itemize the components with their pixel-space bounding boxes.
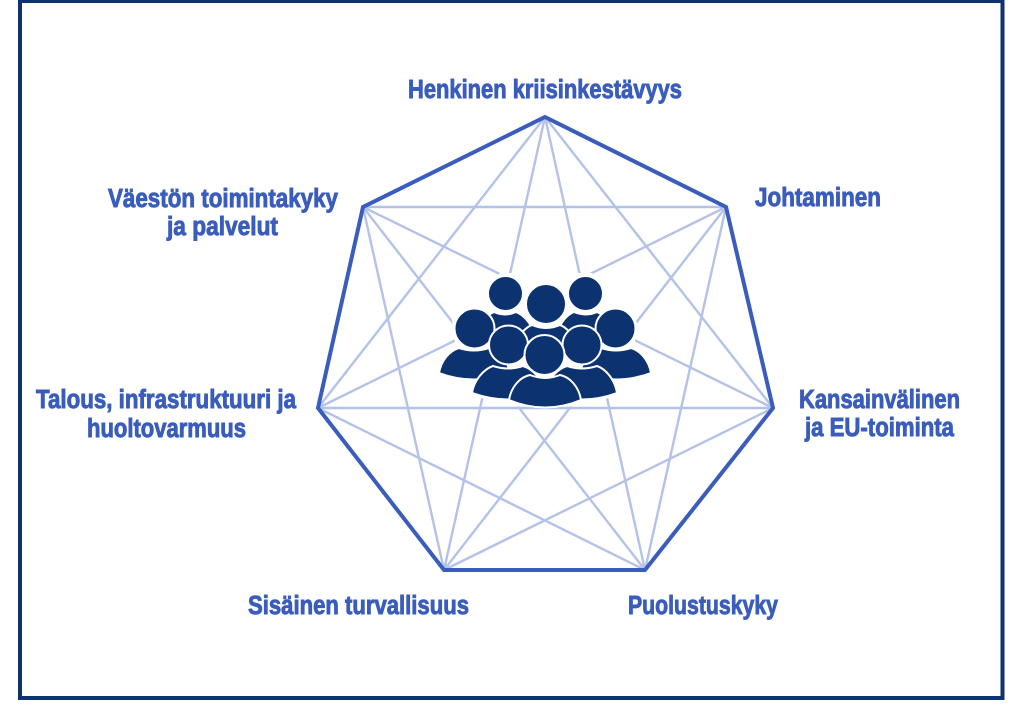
label: Väestön toimintakyky ja palvelut: Väestön toimintakyky: [108, 185, 339, 213]
label: Henkinen kriisinkestävyys: Henkinen kriisinkestävyys: [408, 76, 682, 104]
label: Puolustuskyky: Puolustuskyky: [628, 592, 779, 620]
label: Kansainvälinen ja EU-toiminta: [799, 386, 960, 442]
label: Talous, infrastruktuuri ja huoltovarmuus: [36, 386, 297, 443]
connecting lines between all vertices: [318, 117, 773, 570]
label: Talous, infrastruktuuri ja huoltovarmuus: huoltovarmuus: [87, 415, 246, 443]
icon: group of people: [439, 276, 651, 408]
diagram: heptagon: [318, 117, 773, 570]
label: Väestön toimintakyky ja palvelut: [108, 185, 339, 241]
label: Johtaminen: Johtaminen: [755, 184, 881, 212]
heptagon outline: [318, 117, 773, 570]
label: Väestön toimintakyky ja palvelut: ja palvelut: [166, 213, 278, 241]
label: Talous, infrastruktuuri ja huoltovarmuus: Talous, infrastruktuuri ja: [36, 386, 297, 414]
centre mask behind people: [435, 273, 655, 406]
label: Kansainvälinen ja EU-toiminta: ja EU-toiminta: [804, 414, 955, 442]
label: Kansainvälinen ja EU-toiminta: Kansainvälinen: [799, 386, 960, 414]
label: Sisäinen turvallisuus: Sisäinen turvallisuus: [248, 592, 469, 620]
